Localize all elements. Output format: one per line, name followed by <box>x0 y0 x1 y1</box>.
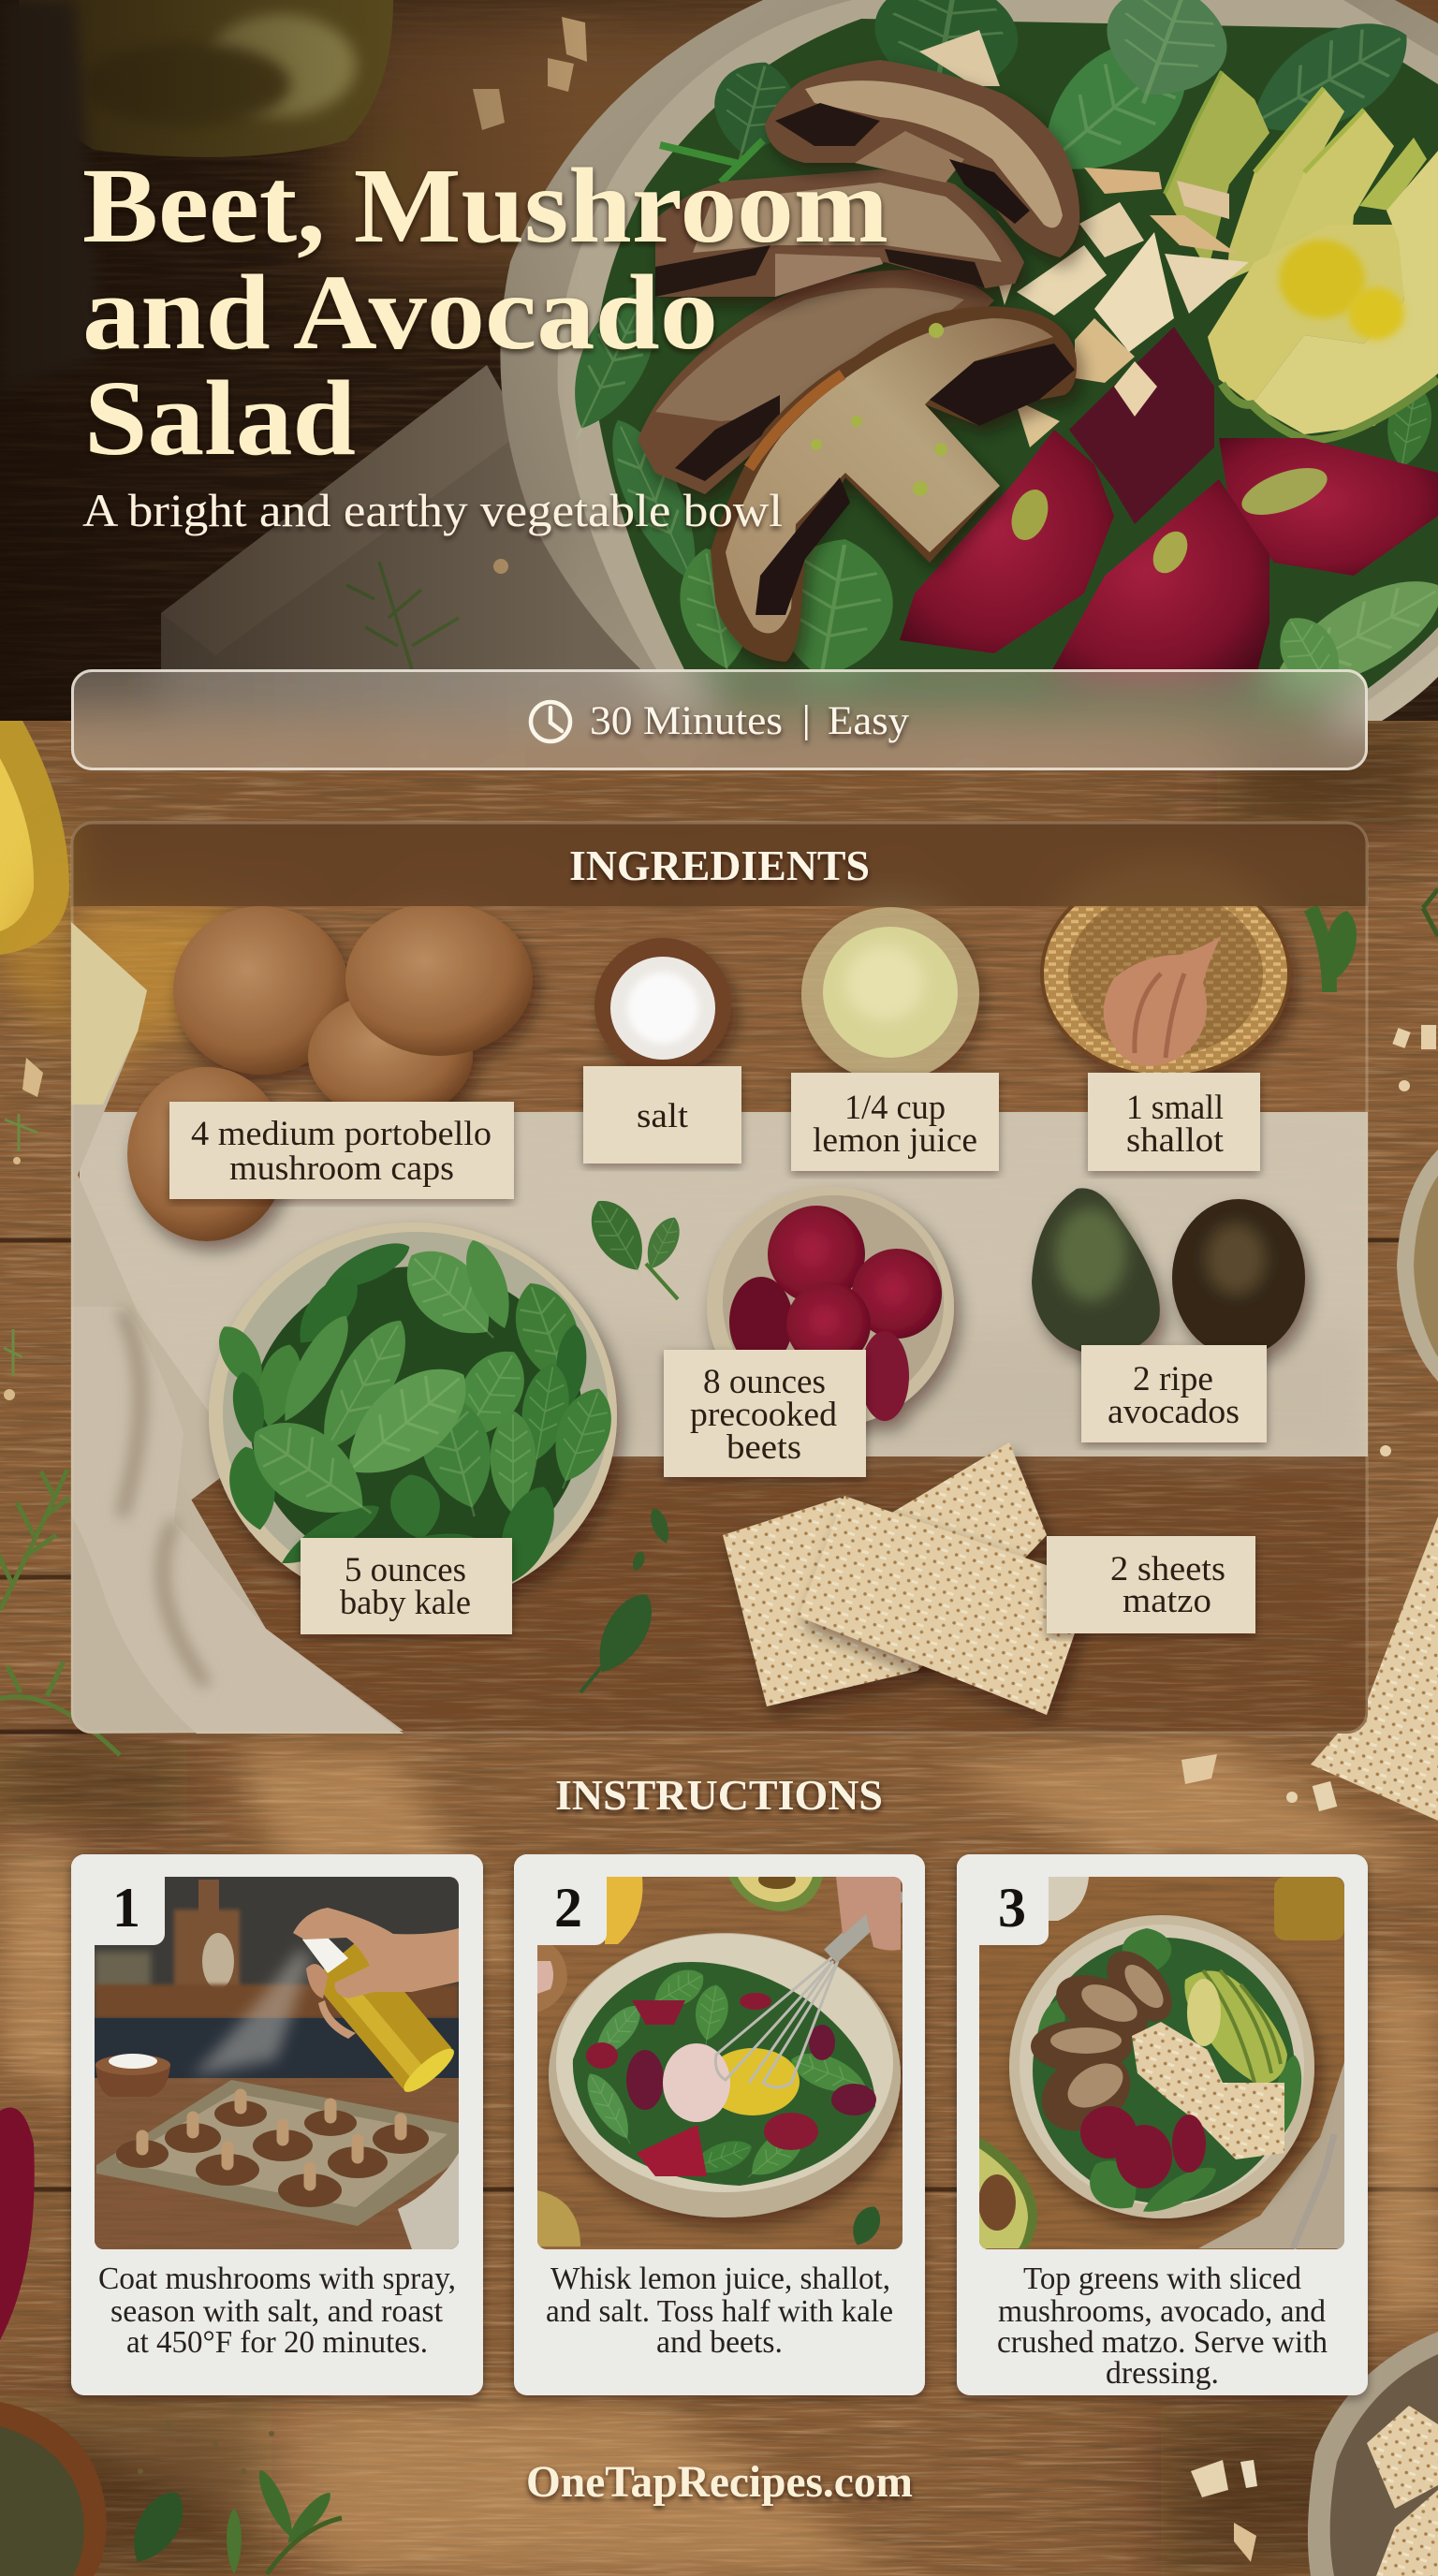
bowl with matzo bottom right <box>1308 2332 1438 2576</box>
matzo crumbles <box>919 30 1249 447</box>
ingredient flat-lay scene <box>71 822 1368 1734</box>
side props right: bowl and matzo <box>1311 889 1438 1821</box>
title <box>82 146 888 477</box>
panel: step 3 <box>957 1854 1368 2395</box>
ingredient: baby kale bowl <box>209 1222 623 1608</box>
subtitle: A bright and earthy vegetable bowl <box>82 484 783 536</box>
label: beets: precooked <box>690 1396 838 1434</box>
bottom corner props: crumbs <box>138 1754 1337 2562</box>
ingredient: avocados <box>1032 1188 1305 1356</box>
mushroom slice 2 <box>655 169 1024 297</box>
herb bowl bottom left <box>0 2402 107 2576</box>
ingredient: portobello mushrooms <box>127 902 533 1241</box>
step 2 number tab: 2 <box>554 1877 582 1939</box>
avocado half <box>978 2137 1037 2248</box>
beet slices <box>900 327 1438 683</box>
label: salt <box>583 1066 741 1164</box>
step 1 number tab: 1 <box>112 1877 140 1939</box>
step 3 text: mushrooms, avocado, and <box>998 2294 1326 2329</box>
roasted mushrooms <box>116 2095 429 2207</box>
label: shallot: shallot <box>1126 1121 1225 1160</box>
label: matzo: 2 sheets <box>1110 1550 1225 1588</box>
label: baby kale <box>301 1538 512 1634</box>
step 2 text: and beets. <box>656 2325 783 2360</box>
time and difficulty text: Easy <box>828 699 910 743</box>
instructions heading: INSTRUCTIONS <box>555 1771 883 1819</box>
step 1 image: spraying mushrooms <box>95 1877 460 2249</box>
mushroom slice 1 <box>765 60 1079 257</box>
label: portobello: 4 medium portobello <box>191 1115 492 1153</box>
label: beets: 8 ounces <box>703 1363 826 1401</box>
bowl <box>500 0 1438 739</box>
ingredients heading: INGREDIENTS <box>569 842 870 889</box>
greens <box>548 0 1438 724</box>
label: beets: beets <box>726 1428 801 1467</box>
mushroom slice 4 <box>711 306 1077 662</box>
title: and Avocado <box>82 253 718 372</box>
fork <box>1293 2134 1334 2248</box>
mixing bowl <box>549 1933 901 2217</box>
step 1 number tab <box>71 1854 165 1945</box>
step 3 text: crushed matzo. Serve with <box>997 2325 1328 2360</box>
ingredient: matzo sheets <box>723 1442 1093 1715</box>
footer website: OneTapRecipes.com <box>526 2457 913 2507</box>
step 3 image: finished bowl <box>978 1877 1344 2249</box>
napkin <box>0 0 683 721</box>
time and difficulty text: 30 Minutes <box>590 699 783 743</box>
step 2 image: whisking salad <box>537 1870 902 2250</box>
mushroom slice 3 <box>638 270 994 494</box>
label: matzo: matzo <box>1123 1582 1211 1620</box>
side props left: oil glass <box>0 721 71 1048</box>
label: lemon juice <box>791 1073 999 1171</box>
step 1 text: Coat mushrooms with spray, <box>98 2261 456 2296</box>
salt dish <box>95 2064 170 2097</box>
salad bowl <box>1009 1915 1314 2218</box>
title: Beet, Mushroom <box>82 146 888 265</box>
step 2 text: and salt. Toss half with kale <box>546 2294 893 2329</box>
step 2 number tab <box>514 1854 607 1945</box>
leaves bottom <box>121 2466 342 2574</box>
avocado fan <box>1165 71 1438 440</box>
step 3 text <box>997 2261 1328 2391</box>
side props: herbs and crumbs left <box>0 1058 120 1755</box>
label: matzo <box>1047 1536 1255 1633</box>
ingredient: lemon juice bowl <box>801 907 979 1081</box>
diagonal light streaks <box>0 1741 1438 2576</box>
label: baby kale: 5 ounces <box>345 1551 466 1589</box>
towel <box>398 2153 459 2249</box>
step 3 number tab <box>957 1854 1049 1945</box>
linen runner <box>80 1112 1368 1456</box>
label: portobello <box>169 1102 514 1199</box>
label: avocados: avocados <box>1108 1393 1240 1431</box>
panel: step 1 <box>71 1854 483 2395</box>
label: beets <box>664 1350 866 1477</box>
oil spray bottle <box>293 1908 460 2098</box>
baking tray <box>96 2080 459 2226</box>
label: portobello: mushroom caps <box>229 1149 454 1188</box>
title: Salad <box>84 359 356 477</box>
time and difficulty text <box>590 699 910 743</box>
beets <box>1080 2106 1206 2188</box>
label: lemon juice: 1/4 cup <box>844 1089 946 1127</box>
label: shallot: 1 small <box>1126 1089 1224 1127</box>
label: lemon juice: lemon juice <box>813 1121 977 1160</box>
step 1 text <box>98 2261 456 2360</box>
label: avocados: 2 ripe <box>1133 1360 1213 1398</box>
spray mist <box>192 1949 311 2076</box>
label: baby kale: baby kale <box>340 1584 471 1622</box>
crumbs and thyme on table <box>346 17 587 669</box>
ingredient: shallot in basket <box>1040 869 1291 1078</box>
loose leaves and twigs <box>580 908 1361 1692</box>
step 1 text: season with salt, and roast <box>110 2294 444 2329</box>
hero salad photo <box>0 0 1438 739</box>
step 2 text: Whisk lemon juice, shallot, <box>550 2261 890 2296</box>
step 3 text: Top greens with sliced <box>1023 2261 1301 2296</box>
label: shallot <box>1088 1073 1260 1171</box>
glass top left <box>19 0 393 157</box>
panel: step 2 <box>514 1854 925 2395</box>
hand <box>293 1908 459 1998</box>
step 1 text: at 450°F for 20 minutes. <box>126 2325 428 2360</box>
ingredient: beets bowl <box>707 1187 954 1427</box>
avocado fan <box>1184 1970 1287 2085</box>
beet at left edge <box>0 2108 35 2340</box>
sliced mushrooms <box>1028 1939 1184 2146</box>
whisk and hand <box>715 1956 838 2087</box>
ingredient: salt bowl <box>594 938 731 1073</box>
crushed matzo <box>1132 2022 1284 2159</box>
step 3 number tab: 3 <box>998 1877 1026 1939</box>
ingredient: spinach leaf <box>580 1191 687 1299</box>
step 3 text: dressing. <box>1106 2356 1219 2391</box>
label: salt: salt <box>637 1097 689 1135</box>
icon: clock <box>531 702 570 741</box>
folded napkin <box>71 922 404 1734</box>
label: avocados <box>1081 1345 1267 1442</box>
step 2 text <box>546 2261 893 2360</box>
